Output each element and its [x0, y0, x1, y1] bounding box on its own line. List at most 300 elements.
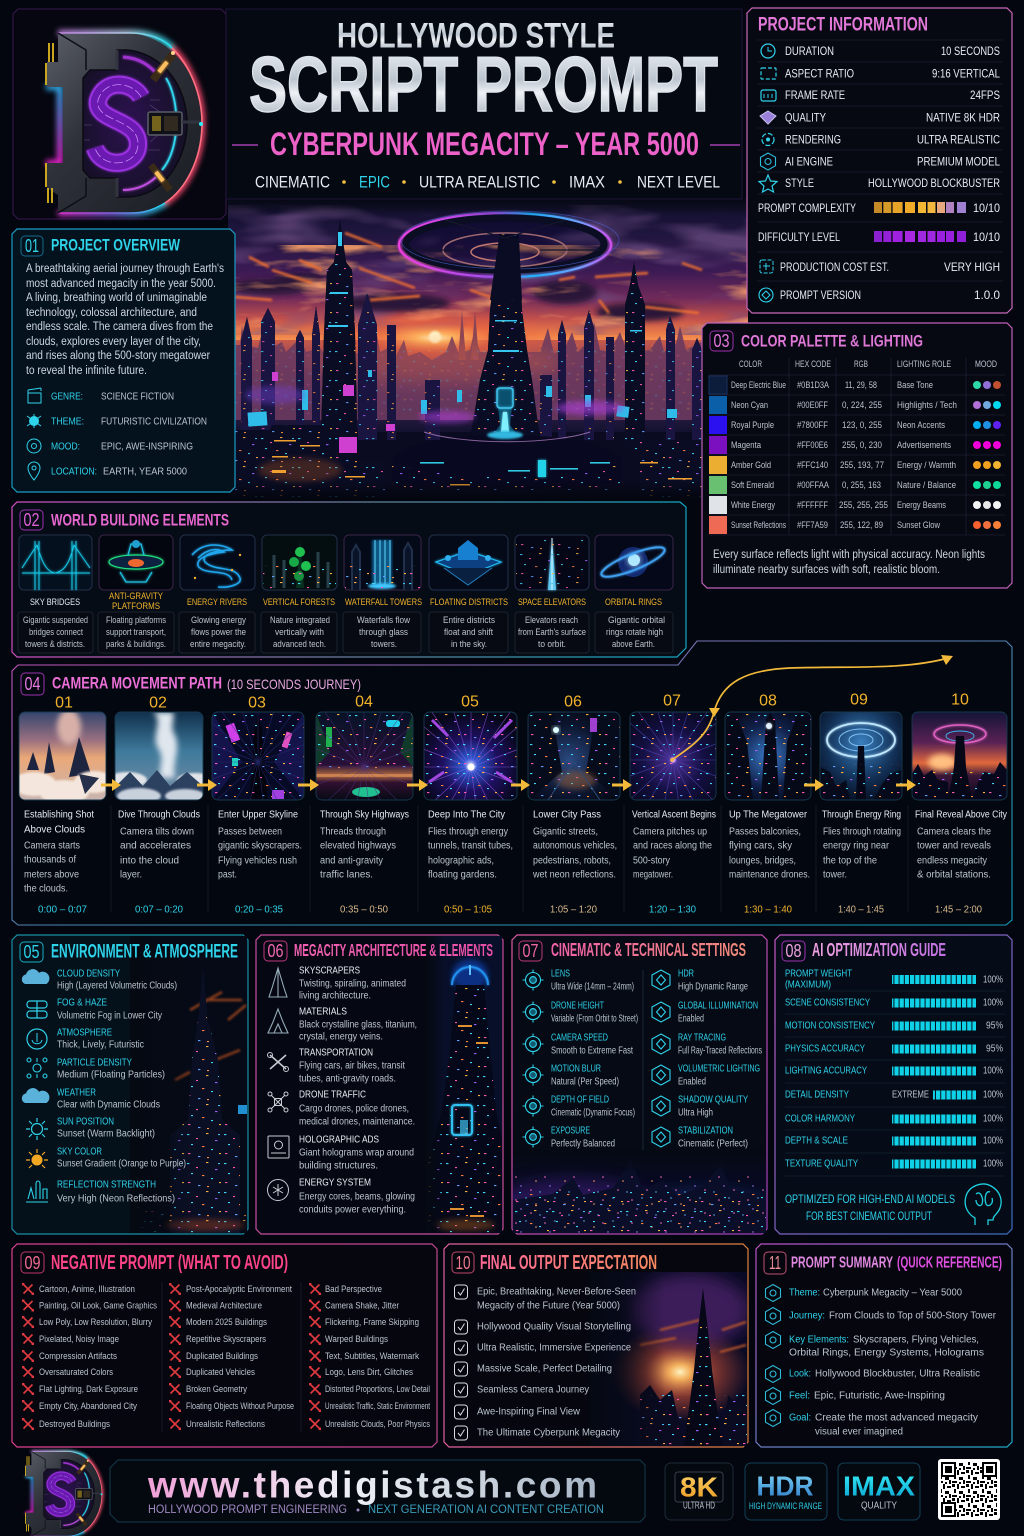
background tower image — [428, 936, 502, 1233]
summary: look: Look: — [789, 1368, 811, 1380]
metric: depth and scale: DEPTH & SCALE — [785, 1136, 848, 1146]
metric: lighting accuracy — [785, 1066, 1003, 1076]
row: quality — [760, 110, 1000, 124]
tagline — [255, 172, 720, 192]
item: transportation: TRANSPORTATION — [299, 1048, 373, 1058]
setting: depth of field: DEPTH OF FIELD — [551, 1094, 609, 1106]
column 2 list: Duplicated Vehicles — [186, 1367, 255, 1377]
metric: texture quality — [785, 1158, 1003, 1170]
row: ai engine — [760, 153, 1000, 170]
badge: 8K ultra HD: 8K — [680, 1472, 718, 1502]
tagline: EPIC — [359, 172, 390, 192]
table header: RGB — [854, 359, 868, 369]
setting: volumetric lighting: Enabled — [678, 1076, 706, 1088]
setting: drone height: Variable (From Orbit to Street) — [551, 1014, 638, 1024]
setting: stabilization: STABILIZATION — [678, 1126, 733, 1136]
column 3 list: Unrealistic Clouds, Poor Physics — [325, 1419, 430, 1429]
element: space elevators: SPACE ELEVATORS — [518, 597, 586, 607]
element: waterfall towers — [343, 535, 422, 653]
tagline: NEXT LEVEL — [637, 172, 720, 192]
item: energy system: Energy cores, beams, glowing — [299, 1192, 415, 1202]
row: ai engine: AI ENGINE — [785, 154, 833, 168]
step numbers: 02 — [149, 694, 167, 712]
step 08 text: flying cars, sky — [729, 840, 792, 852]
column 1 list — [22, 1283, 157, 1430]
row: prompt version: 1.0.0 — [974, 288, 1000, 302]
item: ultra realistic — [454, 1341, 631, 1355]
step numbers: 03 — [248, 694, 266, 712]
palette note: illuminate nearby surfaces with soft, realistic bloom. — [713, 564, 940, 576]
row: production cost: PRODUCTION COST EST. — [780, 260, 889, 274]
step 02 text: layer. — [120, 870, 142, 880]
column 1 list: Compression Artifacts — [39, 1351, 117, 1361]
frame 06: lower city pass — [528, 712, 620, 800]
footer url banner — [110, 1460, 645, 1522]
panel 06: megacity architecture and elements — [256, 935, 503, 1234]
column 3 list: Distorted Proportions, Low Detail — [325, 1384, 430, 1394]
metric: texture quality: 100% — [983, 1158, 1003, 1170]
element: vertical forests: Nature integrated — [270, 615, 330, 625]
row: magenta — [709, 436, 1001, 454]
element: space elevators: Elevators reach — [525, 615, 578, 625]
item: final view — [454, 1405, 581, 1419]
metric: physics accuracy: PHYSICS ACCURACY — [785, 1044, 865, 1054]
metric: depth and scale: 100% — [983, 1136, 1003, 1146]
step 10 text: Camera clears the — [917, 826, 991, 838]
setting: exposure: Perfectly Balanced — [551, 1138, 615, 1150]
metric: color harmony: COLOR HARMONY — [785, 1114, 855, 1124]
field: mood: MOOD: — [51, 442, 80, 452]
metric: physics accuracy: 95% — [986, 1044, 1003, 1054]
summary: goal: Goal: — [789, 1412, 811, 1424]
frame 03: enter upper skyline — [212, 712, 304, 800]
row: amber gold: Energy / Warmth — [897, 460, 956, 470]
metric: color harmony — [785, 1114, 1003, 1124]
column 3 list: Bad Perspective — [325, 1284, 382, 1294]
heading: PROMPT SUMMARY — [791, 1254, 893, 1272]
setting: global illumination — [652, 1000, 758, 1024]
section number 01: 01 — [25, 236, 39, 256]
step 04 text: Through Sky Highways — [320, 810, 409, 820]
step 02 text: Dive Through Clouds — [118, 810, 200, 820]
summary: journey: Journey: — [789, 1310, 825, 1322]
optimization note — [785, 1192, 955, 1223]
step 03 text: gigantic skyscrapers. — [218, 840, 302, 852]
section number 05: 05 — [24, 942, 40, 962]
row: duration: DURATION — [785, 44, 834, 58]
title: hollywood style: HOLLYWOOD STYLE — [337, 16, 615, 56]
summary: feel — [766, 1388, 945, 1404]
qr code — [938, 1459, 1000, 1520]
overview text: and rises along the 500-story megatower — [26, 350, 210, 362]
row: royal purple: Neon Accents — [897, 420, 945, 430]
setting: exposure — [522, 1126, 615, 1150]
row: white energy — [709, 496, 1001, 514]
step 10 text: 1:45 – 2:00 — [935, 904, 982, 916]
element: energy rivers — [179, 535, 255, 653]
element: energy rivers: entire megacity. — [190, 639, 246, 649]
panel 02: world building elements — [12, 502, 686, 657]
element: vertical forests — [261, 535, 337, 653]
metric: depth and scale — [785, 1136, 1003, 1146]
row: ai engine: PREMIUM MODEL — [917, 154, 1000, 168]
optimization note: FOR BEST CINEMATIC OUTPUT — [806, 1209, 932, 1223]
frame 09: through energy ring — [820, 712, 902, 800]
column 2 list: Duplicated Buildings — [186, 1351, 258, 1361]
element: vertical forests: advanced tech. — [273, 639, 326, 649]
row: aspect ratio: ASPECT RATIO — [785, 66, 854, 80]
step 08 text: maintenance drones. — [729, 870, 810, 880]
element: waterfall towers: towers. — [371, 639, 397, 649]
item: particle density — [27, 1058, 165, 1080]
step 05 text: floating gardens. — [428, 870, 497, 880]
setting: motion blur — [522, 1064, 619, 1088]
arrow: camera ascent curve — [670, 655, 953, 762]
setting: lens: LENS — [551, 968, 570, 980]
setting: hdr: High Dynamic Range — [678, 982, 748, 992]
column 2 list: Medieval Architecture — [186, 1300, 262, 1310]
summary: key elements — [766, 1332, 984, 1358]
step 06 text: pedestrians, robots, — [533, 856, 611, 866]
step 04 text: traffic lanes. — [320, 870, 373, 880]
step numbers: 08 — [759, 692, 777, 710]
summary: key elements: Orbital Rings, Energy Systems, Holograms — [789, 1348, 984, 1358]
item: materials: MATERIALS — [299, 1006, 347, 1018]
step 06 text: Lower City Pass — [533, 810, 601, 820]
panel 11: prompt summary — [756, 1244, 1012, 1447]
step 09 text — [822, 810, 901, 916]
step 07 text: 500-story — [633, 856, 670, 866]
metric: color harmony: 100% — [983, 1114, 1003, 1124]
element: waterfall towers: through glass — [359, 627, 408, 637]
row: deep electric blue: Base Tone — [897, 380, 933, 390]
item: weather: Clear with Dynamic Clouds — [57, 1100, 160, 1110]
row: rendering — [762, 132, 1000, 146]
item: sky color: Sunset Gradient (Orange to Purple) — [57, 1158, 186, 1170]
field: mood — [27, 439, 193, 453]
step 01 text: 0:00 – 0:07 — [38, 904, 87, 916]
palette note — [713, 549, 985, 576]
column 3 list: Flickering, Frame Skipping — [325, 1317, 419, 1327]
summary: goal: Create the most advanced megacity — [815, 1412, 978, 1424]
step 08 text — [729, 810, 810, 916]
row: production cost — [760, 260, 1000, 274]
item: drone traffic — [268, 1090, 415, 1128]
arrows between frames — [101, 779, 916, 791]
step numbers — [55, 692, 969, 712]
element: space elevators: to orbit. — [538, 639, 566, 649]
row: deep electric blue: 11, 29, 58 — [845, 380, 877, 390]
step 09 text: Through Energy Ring — [822, 810, 901, 820]
setting: camera speed: Smooth to Extreme Fast — [551, 1046, 633, 1056]
element: sky bridges — [18, 535, 93, 653]
section number 04: 04 — [24, 674, 40, 694]
row: soft emerald: 0, 255, 163 — [842, 480, 881, 490]
setting: lens: Ultra Wide (14mm – 24mm) — [551, 982, 634, 992]
frame 08: up the megatower — [726, 712, 811, 800]
item: weather: WEATHER — [57, 1088, 96, 1098]
subtitle side rules — [232, 144, 740, 146]
item: sun position — [26, 1116, 155, 1140]
row: aspect ratio — [761, 66, 1000, 80]
footer tagline — [148, 1504, 604, 1516]
setting: camera speed — [522, 1032, 633, 1056]
item: final view: Awe-Inspiring Final View — [477, 1406, 581, 1418]
icon: ai brain head — [965, 1184, 1001, 1225]
summary: feel: Feel: — [789, 1390, 810, 1402]
item: materials — [268, 1006, 417, 1042]
row: sunset reflections: Sunset Glow — [897, 520, 940, 530]
panel: project information — [747, 8, 1012, 313]
column 2 list: Post-Apocalyptic Environment — [186, 1284, 292, 1294]
step 08 text: Passes balconies, — [729, 826, 801, 838]
badge: HDR — [745, 1463, 827, 1520]
table header: LIGHTING ROLE — [897, 359, 951, 369]
item: holographic ads: Giant holograms wrap around — [299, 1148, 414, 1158]
item: fog and haze: Volumetric Fog in Lower City — [57, 1010, 162, 1022]
item: skyscrapers: Twisting, spiraling, animated — [299, 978, 406, 990]
step 04 text: and anti-gravity — [320, 856, 383, 866]
step numbers: 06 — [564, 694, 582, 710]
summary: look — [766, 1366, 980, 1382]
column 1 list: Cartoon, Anime, Illustration — [39, 1284, 135, 1294]
section number 11 — [764, 1252, 786, 1274]
element: space elevators — [515, 535, 589, 653]
step 01 text: meters above — [24, 870, 79, 880]
heading: WORLD BUILDING ELEMENTS — [51, 510, 229, 530]
row: soft emerald: Soft Emerald — [731, 480, 774, 490]
step 08 text: lounges, bridges, — [729, 856, 796, 866]
tagline: CINEMATIC — [255, 172, 330, 192]
row: white energy: 255, 255, 255 — [839, 500, 888, 510]
element: energy rivers: ENERGY RIVERS — [187, 597, 247, 607]
step 07 text — [632, 810, 716, 916]
overview text — [26, 263, 224, 377]
row: quality: NATIVE 8K HDR — [926, 110, 1000, 124]
item: particle density: PARTICLE DENSITY — [57, 1058, 132, 1068]
element: energy rivers: flows power the — [191, 627, 246, 637]
step 10 text: Final Reveal Above City — [915, 810, 1007, 820]
step 01 text — [24, 810, 94, 916]
summary: key elements: Skyscrapers, Flying Vehicles, — [853, 1334, 979, 1346]
column 3 list — [309, 1283, 430, 1430]
setting: stabilization: Cinematic (Perfect) — [678, 1138, 748, 1150]
metric: scene consistency: 100% — [983, 998, 1003, 1008]
element: sky bridges: SKY BRIDGES — [30, 597, 80, 607]
row: frame rate: 24FPS — [970, 88, 1000, 102]
step 10 text: & orbital stations. — [917, 870, 991, 880]
table header — [739, 359, 997, 369]
item: epic: Megacity of the Future (Year 5000) — [477, 1300, 620, 1312]
row: difficulty level — [758, 230, 1000, 244]
badge: IMAX: QUALITY — [861, 1500, 897, 1512]
column 1 list: Pixelated, Noisy Image — [39, 1334, 119, 1344]
item: cloud density: CLOUD DENSITY — [57, 968, 120, 980]
step 03 text: Passes between — [218, 826, 282, 838]
item: particle density: Medium (Floating Particles) — [57, 1070, 165, 1080]
step 10 text: tower and reveals — [917, 840, 991, 852]
summary: look: Hollywood Blockbuster, Ultra Realistic — [815, 1368, 980, 1380]
element: waterfall towers: Waterfalls flow — [357, 615, 410, 625]
summary: journey — [766, 1308, 997, 1324]
step 07 text: megatower. — [633, 870, 673, 880]
overview text: clouds, explores every layer of the city, — [26, 336, 201, 348]
step 01 text: Above Clouds — [24, 824, 85, 836]
badge: HDR: HDR — [756, 1470, 814, 1502]
row: style — [759, 175, 1000, 192]
column 3 list: Warped Buildings — [325, 1334, 388, 1344]
item: sky color: SKY COLOR — [57, 1146, 102, 1158]
frame 01: above clouds — [19, 712, 106, 800]
summary: theme: Cyberpunk Megacity – Year 5000 — [823, 1288, 962, 1298]
metric: prompt weight: (MAXIMUM) — [785, 980, 831, 990]
row: difficulty level: DIFFICULTY LEVEL — [758, 230, 840, 244]
setting: motion blur: Natural (Per Speed) — [551, 1076, 619, 1088]
item: holographic ads — [268, 1134, 414, 1172]
table header: HEX CODE — [795, 359, 831, 369]
row: royal purple: #7800FF — [797, 420, 828, 430]
step numbers: 01 — [55, 694, 73, 712]
item: drone traffic: DRONE TRAFFIC — [299, 1090, 366, 1100]
summary: theme: Theme: — [789, 1288, 820, 1298]
metric: motion consistency — [785, 1020, 1003, 1032]
column 3 list: Unrealistic Traffic, Static Environment — [325, 1401, 430, 1411]
field: location: EARTH, YEAR 5000 — [103, 466, 187, 478]
element: waterfall towers: WATERFALL TOWERS — [345, 597, 422, 607]
panel 05: environment and atmosphere — [12, 935, 248, 1234]
column 1 list: Low Poly, Low Resolution, Blurry — [39, 1317, 152, 1327]
heading: AI OPTIMIZATION GUIDE — [812, 940, 946, 960]
step 04 text — [320, 810, 409, 916]
item: cloud density: High (Layered Volumetric Clouds) — [57, 980, 177, 992]
overview text: A living, breathing world of unimaginable — [26, 292, 207, 304]
row: sunset reflections: 255, 122, 89 — [840, 520, 883, 530]
element: anti-gravity platforms — [98, 535, 174, 653]
section number 03: 03 — [714, 331, 730, 351]
row: sunset reflections: Sunset Reflections — [731, 520, 786, 530]
element: floating districts — [429, 535, 508, 653]
element: vertical forests: VERTICAL FORESTS — [263, 597, 335, 607]
heading: (10 SECONDS JOURNEY) — [227, 676, 361, 692]
item: massive scale: Massive Scale, Perfect Detailing — [477, 1364, 612, 1374]
step 06 text: autonomous vehicles, — [533, 840, 617, 852]
title block — [226, 9, 742, 199]
column 1 list: Empty City, Abandoned City — [39, 1401, 137, 1411]
setting: shadow quality — [652, 1094, 748, 1118]
setting: depth of field — [522, 1094, 635, 1118]
row: sunset reflections: #FF7A59 — [797, 520, 828, 530]
element: orbital rings: above Earth. — [612, 639, 655, 649]
summary: key elements: Key Elements: — [789, 1334, 849, 1346]
panel 09: negative prompt — [12, 1244, 437, 1447]
element: anti-gravity platforms: PLATFORMS — [112, 601, 160, 611]
column 3 list: Logo, Lens Dirt, Glitches — [325, 1367, 413, 1377]
heading: MEGACITY ARCHITECTURE & ELEMENTS — [294, 940, 493, 960]
step 01 text: Camera starts — [24, 840, 80, 852]
row: soft emerald — [709, 476, 1001, 494]
element: floating districts: Entire districts — [443, 615, 495, 625]
website url: www.thedigistash.com — [147, 1464, 597, 1506]
overview text: endless scale. The camera dives from the — [26, 321, 213, 333]
step 10 text: endless megacity — [917, 856, 987, 866]
column 3 list: Text, Subtitles, Watermark — [325, 1351, 419, 1361]
item: energy system: conduits power everything. — [299, 1204, 406, 1216]
column 2 list: Modern 2025 Buildings — [186, 1317, 267, 1327]
element: floating districts: float and shift — [444, 627, 493, 637]
item: hollywood quality — [454, 1320, 631, 1334]
metric: lighting accuracy: LIGHTING ACCURACY — [785, 1066, 867, 1076]
step 04 text: Threads through — [320, 826, 386, 838]
setting: volumetric lighting — [652, 1064, 760, 1088]
item: materials: crystal, energy veins. — [299, 1032, 383, 1042]
element: orbital rings: ORBITAL RINGS — [605, 597, 662, 607]
summary: goal — [766, 1410, 978, 1438]
panel 04: camera movement path — [12, 641, 1012, 925]
row: amber gold — [709, 456, 1001, 474]
badge: HDR: HIGH DYNAMIC RANGE — [749, 1501, 822, 1511]
step 05 text: Deep Into The City — [428, 810, 505, 820]
frame 02: dive through clouds — [115, 712, 203, 800]
step 05 text — [428, 810, 513, 916]
panel 07: cinematic and technical settings — [493, 935, 773, 1234]
step 09 text: 1:40 – 1:45 — [838, 904, 884, 916]
setting: lens — [522, 968, 634, 992]
item: epic — [454, 1285, 636, 1312]
column 1 list: Flat Lighting, Dark Exposure — [39, 1384, 138, 1394]
setting: exposure: EXPOSURE — [551, 1126, 590, 1136]
step 06 text — [532, 810, 617, 916]
element: space elevators: from Earth's surface — [518, 627, 586, 637]
column 2 list: Unrealistic Reflections — [186, 1419, 265, 1429]
heading: PROJECT OVERVIEW — [51, 236, 181, 254]
column 1 list: Destroyed Buildings — [39, 1419, 110, 1429]
section number 08: 08 — [786, 941, 802, 961]
column 2 list — [169, 1283, 294, 1430]
row: frame rate: FRAME RATE — [785, 88, 845, 102]
step 02 text — [118, 810, 200, 916]
step 03 text: Flying vehicles rush — [218, 856, 297, 866]
row: magenta: 255, 0, 230 — [842, 440, 882, 450]
footer logo — [26, 1452, 102, 1536]
step 07 text: 1:20 – 1:30 — [649, 904, 696, 916]
item: fog and haze — [27, 998, 162, 1022]
step 07 text: Camera pitches up — [633, 826, 707, 838]
item: holographic ads: building structures. — [299, 1160, 378, 1172]
metric: texture quality: TEXTURE QUALITY — [785, 1158, 858, 1170]
element: energy rivers: Glowing energy — [191, 615, 246, 625]
icon: D$ logo — [46, 33, 203, 213]
row: style: STYLE — [785, 176, 814, 190]
row: neon cyan: 0, 224, 255 — [842, 400, 882, 410]
metric: detail density: EXTREME — [892, 1090, 929, 1100]
step 03 text — [218, 810, 302, 916]
metric: motion consistency: MOTION CONSISTENCY — [785, 1020, 875, 1032]
table header: MOOD — [975, 359, 997, 369]
item: massive scale — [454, 1362, 612, 1376]
palette note: Every surface reflects light with physical accuracy. Neon lights — [713, 549, 985, 561]
metric: lighting accuracy: 100% — [983, 1066, 1003, 1076]
field: mood: EPIC, AWE-INSPIRING — [101, 442, 193, 452]
heading: FINAL OUTPUT EXPECTATION — [480, 1252, 657, 1274]
metric: physics accuracy — [785, 1044, 1003, 1054]
metric: detail density: 100% — [983, 1090, 1003, 1100]
setting: hdr: HDR — [678, 968, 694, 980]
item: ultimate megacity: The Ultimate Cyberpunk Megacity — [477, 1428, 620, 1438]
panel: logo — [13, 9, 226, 219]
badge: IMAX: IMAX — [843, 1470, 915, 1502]
step 01 text: the clouds. — [24, 884, 68, 894]
row: neon cyan: Neon Cyan — [731, 400, 768, 410]
